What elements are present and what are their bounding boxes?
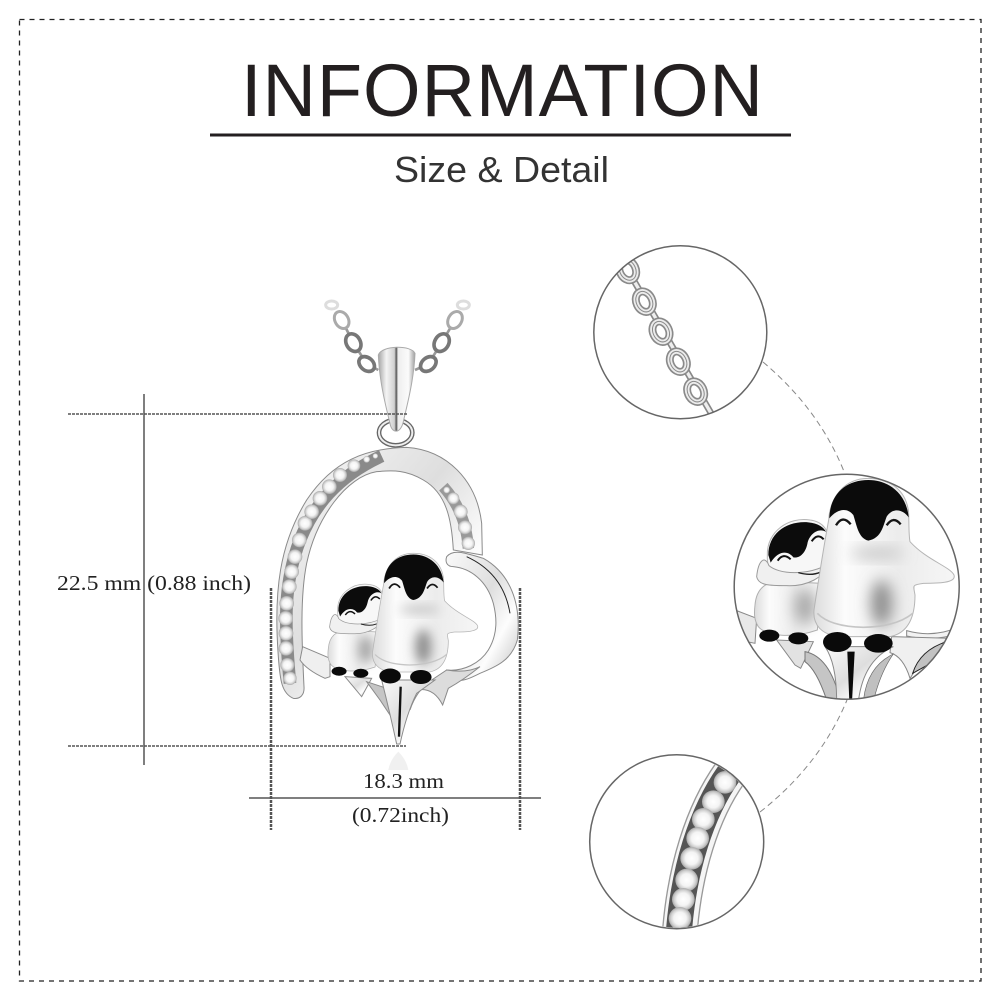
- heart frame: [277, 447, 482, 698]
- penguins: [328, 553, 478, 684]
- branch base: [300, 647, 480, 744]
- pave stones right: [443, 487, 475, 550]
- title underline: [210, 134, 791, 136]
- jump ring: [379, 420, 412, 445]
- width extension lines: [271, 588, 520, 830]
- height extension lines: [68, 414, 407, 746]
- bail: [378, 347, 415, 431]
- detail circle: pave stones: [590, 755, 764, 930]
- height line: [143, 394, 145, 765]
- dashed connector top: [763, 362, 845, 474]
- curled tail: [446, 552, 518, 680]
- dimension lines: [68, 394, 541, 830]
- pendant necklace illustration: [277, 301, 518, 770]
- dashed connector bottom: [760, 700, 847, 812]
- pave stones left: [278, 453, 382, 685]
- width line: [249, 797, 541, 799]
- height label: 22.5 mm (0.88 inch): [57, 571, 251, 595]
- subtitle: Size & Detail: [394, 149, 609, 190]
- detail circle: chain: [594, 246, 767, 420]
- width label inch: (0.72inch): [352, 803, 449, 827]
- faint reflection: [388, 752, 408, 770]
- chain: [326, 301, 469, 374]
- detail circle: penguins: [734, 474, 960, 702]
- title: INFORMATION: [241, 49, 763, 132]
- width label mm: 18.3 mm: [363, 769, 444, 793]
